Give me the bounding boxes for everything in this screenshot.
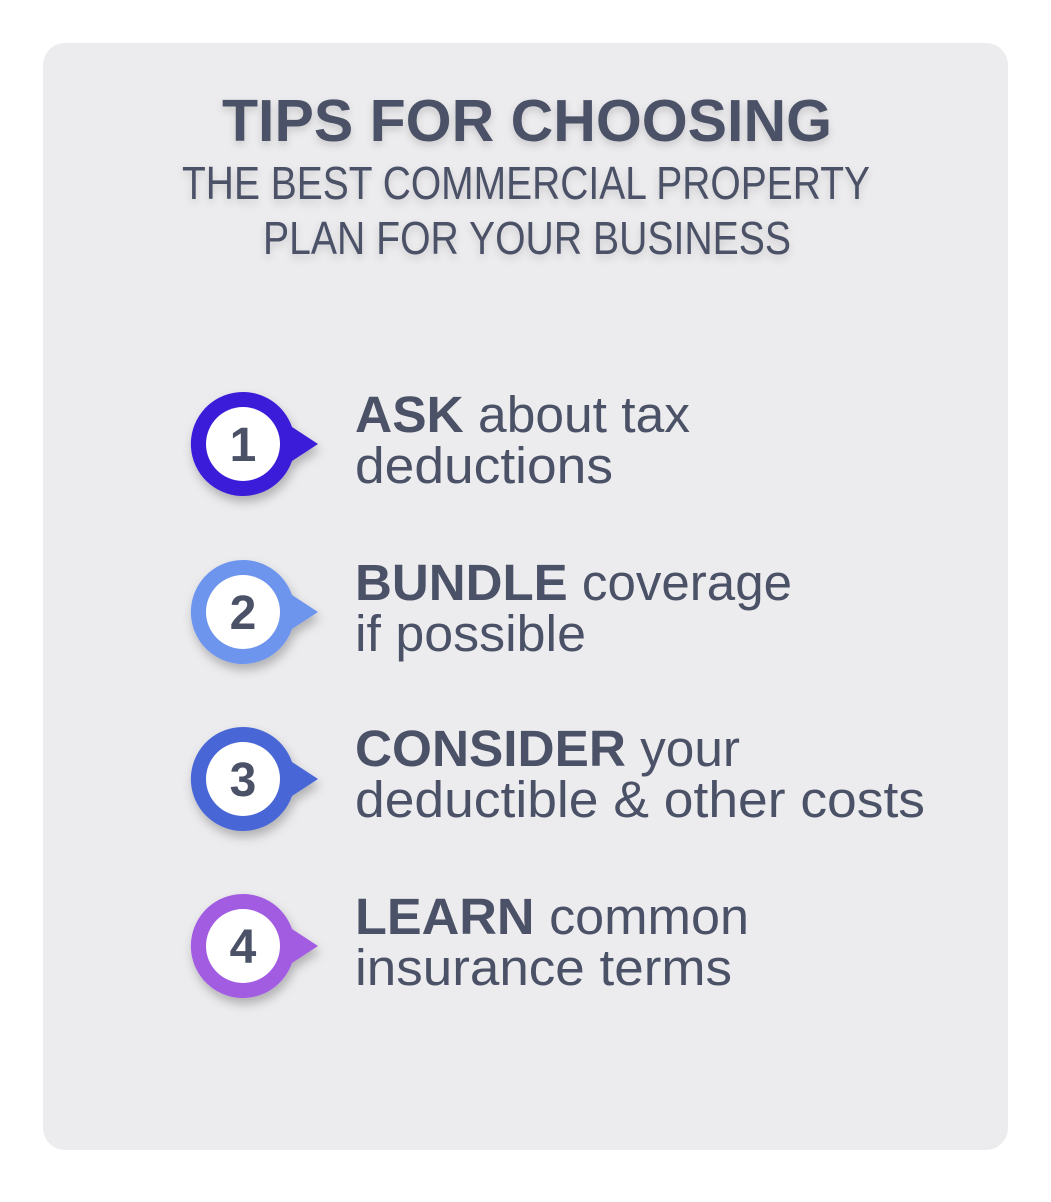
icon: number 1 badge bbox=[191, 392, 318, 496]
text: tip 1: deductions bbox=[355, 437, 613, 494]
icon: number 2 badge bbox=[191, 560, 318, 664]
icon: number 4 badge: 4 bbox=[230, 921, 257, 974]
text: tip 3: deductible & other costs bbox=[355, 771, 925, 828]
text: tip 1: ASK about tax bbox=[355, 386, 690, 443]
text: tip 4: insurance terms bbox=[355, 939, 732, 996]
title: THE BEST COMMERCIAL PROPERTY bbox=[182, 157, 870, 209]
text: tip 2: BUNDLE coverage bbox=[355, 554, 792, 611]
text: tip 4: LEARN common bbox=[355, 888, 749, 945]
text: tip 2: if possible bbox=[355, 605, 586, 662]
icon: number 4 badge bbox=[191, 894, 318, 998]
icon: number 2 badge: 2 bbox=[230, 587, 256, 640]
text: tip 1 bbox=[355, 386, 690, 494]
item 2 bbox=[191, 554, 792, 664]
icon: number 3 badge bbox=[191, 727, 318, 831]
item 1 bbox=[191, 386, 690, 496]
text: tip 3: CONSIDER your bbox=[355, 720, 740, 777]
text: tip 2 bbox=[355, 554, 792, 662]
title bbox=[182, 88, 870, 264]
title: TIPS FOR CHOOSING bbox=[222, 88, 832, 154]
icon: number 3 badge: 3 bbox=[230, 754, 256, 807]
text: tip 3 bbox=[355, 720, 925, 828]
icon: number 1 badge: 1 bbox=[230, 419, 256, 472]
title: PLAN FOR YOUR BUSINESS bbox=[263, 212, 791, 264]
item 4 bbox=[191, 888, 749, 998]
item 3 bbox=[191, 720, 925, 831]
text: tip 4 bbox=[355, 888, 749, 996]
